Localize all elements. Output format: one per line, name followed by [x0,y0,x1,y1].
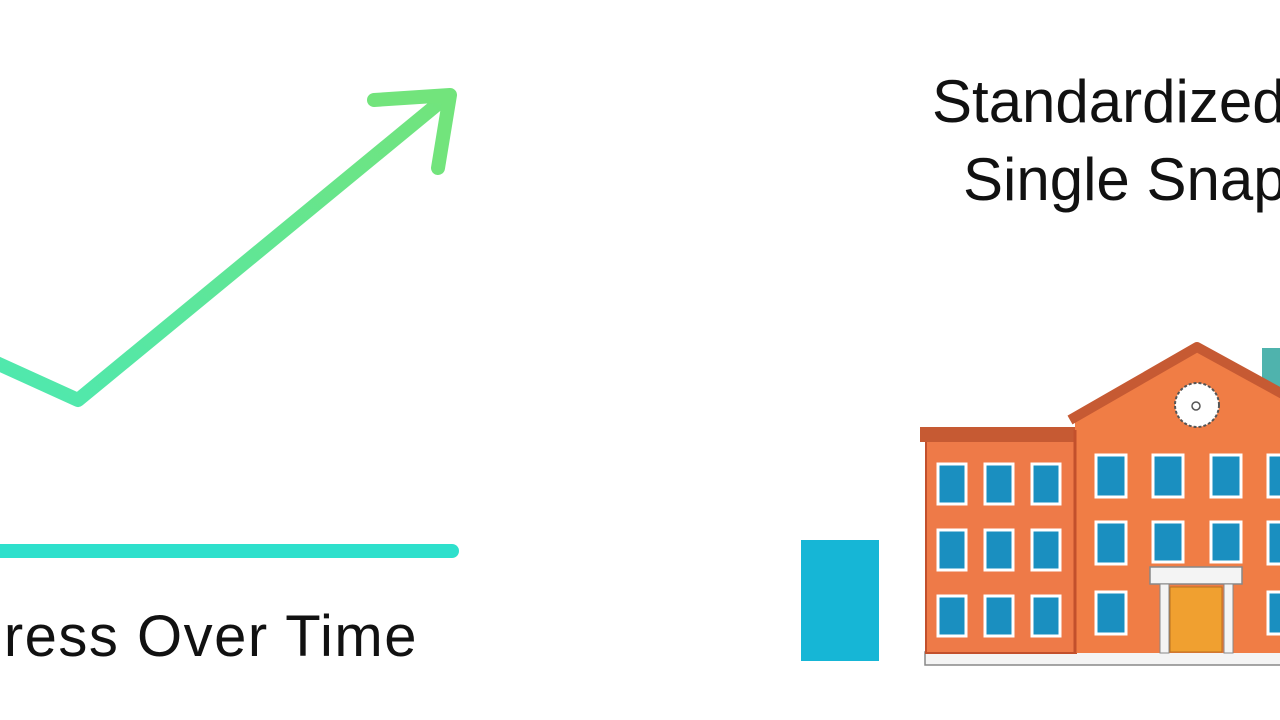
icon: school building [920,347,1280,665]
bar [801,540,879,661]
title: standardized single snapshot [932,68,1280,213]
baseline axis [0,544,452,558]
title: standardized single snapshot: Standardized [932,68,1280,135]
chart: progress line arrow [0,95,450,400]
